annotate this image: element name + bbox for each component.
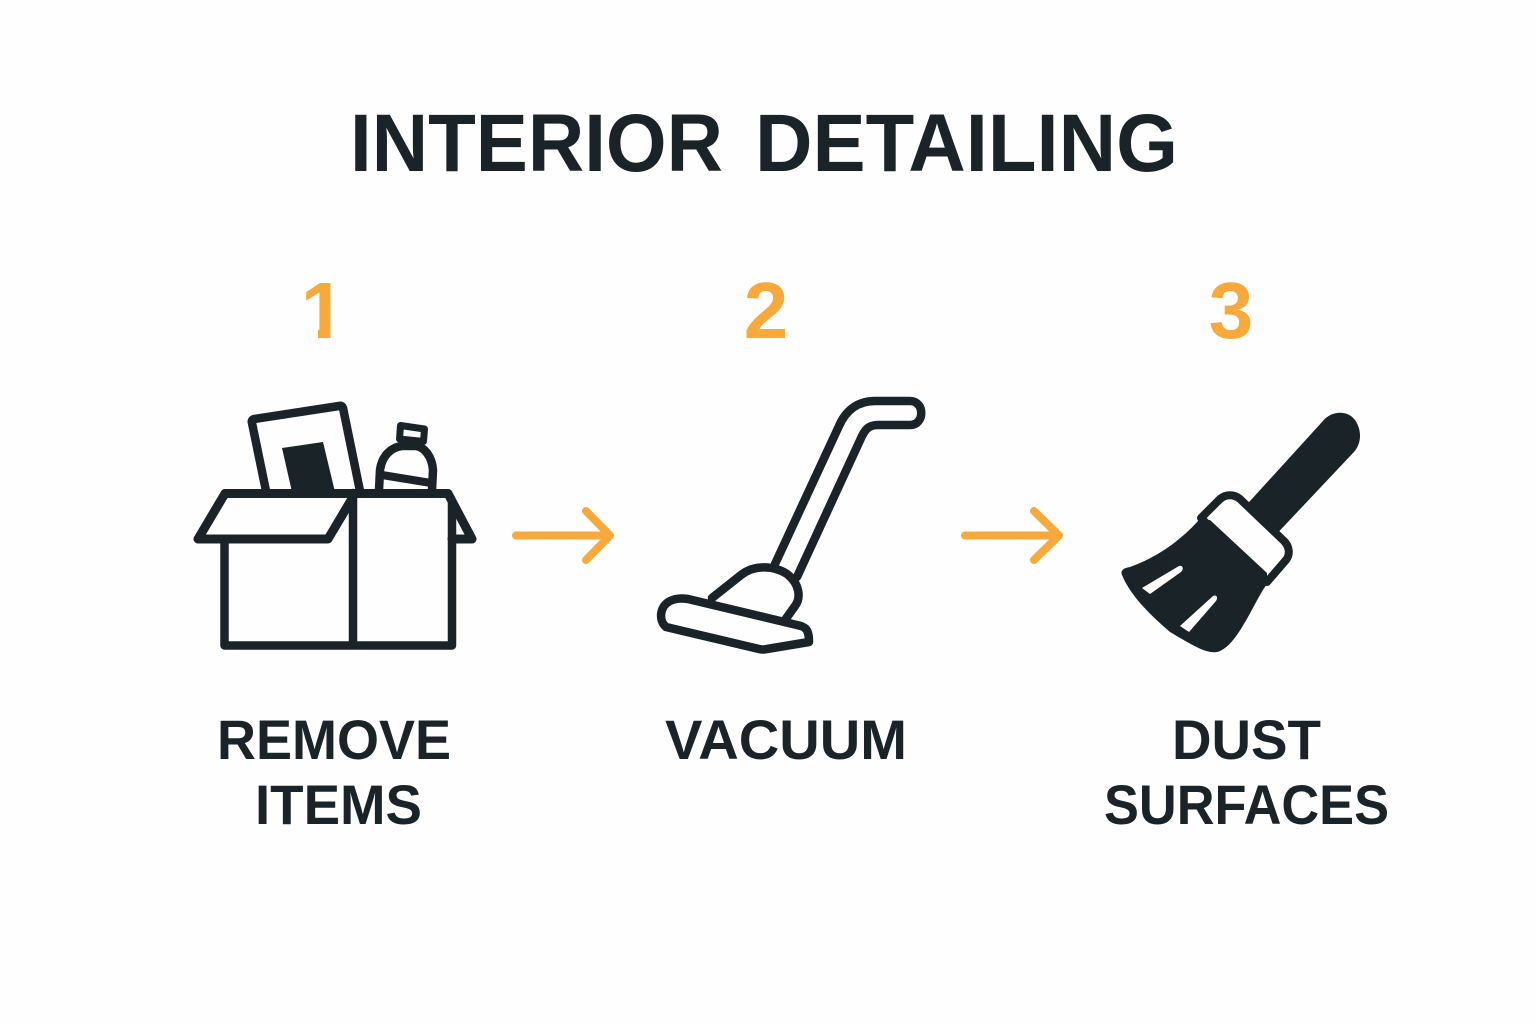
label: remove items: ITEMS — [255, 773, 422, 836]
label: dust surfaces — [1104, 708, 1389, 836]
icon: duster brush — [1121, 413, 1360, 652]
step number 2: 2 — [744, 266, 788, 355]
icon: box with items — [198, 406, 472, 646]
arrow 2 to 3 — [965, 511, 1059, 560]
label: vacuum: VACUUM — [665, 708, 907, 771]
arrow 1 to 2 — [516, 511, 610, 560]
step number 1: 1 — [301, 266, 345, 355]
label: dust surfaces: SURFACES — [1104, 773, 1389, 836]
title: DETAILING — [755, 98, 1178, 189]
title: INTERIOR — [350, 98, 723, 189]
label: dust surfaces: DUST — [1172, 708, 1321, 771]
label: remove items — [217, 708, 451, 836]
title — [350, 98, 1178, 189]
icon: vacuum — [661, 401, 921, 650]
step number 3: 3 — [1209, 266, 1253, 355]
label: remove items: REMOVE — [217, 708, 451, 771]
